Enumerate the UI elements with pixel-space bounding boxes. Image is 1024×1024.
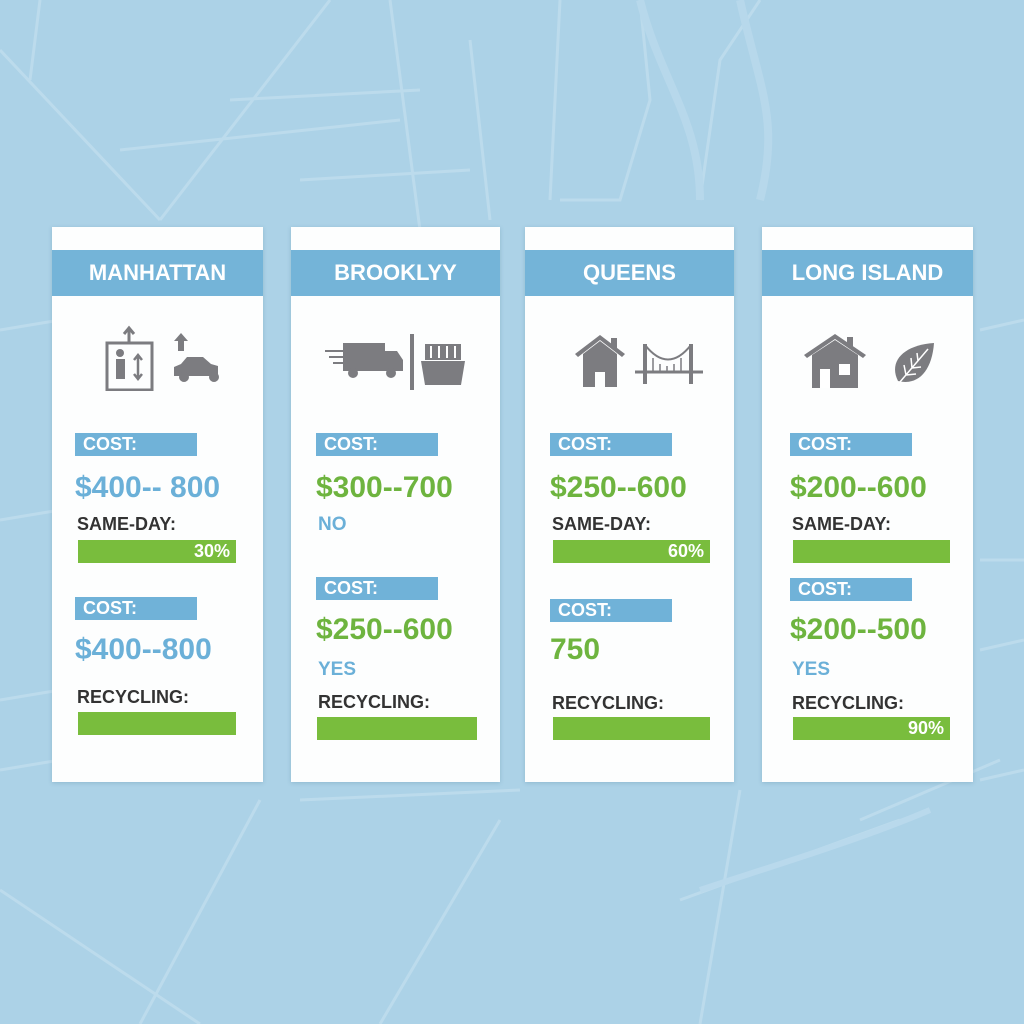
recycling bar: [317, 717, 477, 740]
NO: NO: [318, 514, 346, 535]
price: $200--600: [790, 471, 927, 504]
panel: Manhattan: [52, 227, 263, 782]
heading: [291, 250, 500, 296]
bar 60%: [553, 540, 710, 563]
price: $250--600: [550, 471, 687, 504]
same-day label: SAME-DAY:: [77, 514, 176, 534]
same-day label: SAME-DAY:: [552, 514, 651, 534]
cost label 2: COST:: [83, 598, 137, 618]
YES: YES: [318, 659, 356, 680]
recycling label: RECYCLING:: [77, 687, 189, 707]
cost label: COST:: [324, 434, 378, 454]
heading: LONG ISLAND: [792, 260, 943, 285]
heading: [525, 250, 734, 296]
price 2: $250--600: [316, 613, 453, 646]
bar 90%: [793, 717, 950, 740]
cost label: [790, 433, 912, 456]
price 2: 750: [550, 633, 600, 666]
recycling bar: [553, 717, 710, 740]
cost label 2: [790, 578, 912, 601]
YES: YES: [792, 659, 830, 680]
cost label 2: COST:: [798, 579, 852, 599]
price 2: $400--800: [75, 633, 212, 666]
recycling label: RECYCLING:: [552, 693, 664, 713]
heading: [52, 250, 263, 296]
cost label: [316, 433, 438, 456]
icon: house and leaf: [804, 334, 934, 388]
heading: MANHATTAN: [89, 260, 226, 285]
cost label 2: [550, 599, 672, 622]
cost label 2: COST:: [324, 578, 378, 598]
same-day label: SAME-DAY:: [792, 514, 891, 534]
price 2: $200--500: [790, 613, 927, 646]
icon: house and bridge: [575, 335, 703, 387]
heading: BROOKLYY: [334, 260, 457, 285]
cost label 2: [316, 577, 438, 600]
recycling label: RECYCLING:: [792, 693, 904, 713]
bar 60%: 60%: [668, 541, 704, 561]
cost label 2: COST:: [558, 600, 612, 620]
price: $400-- 800: [75, 471, 220, 504]
cost label: [550, 433, 672, 456]
bar 30%: [78, 540, 236, 563]
cost label: [75, 433, 197, 456]
bar 90%: 90%: [908, 718, 944, 738]
bar 30%: 30%: [194, 541, 230, 561]
panel: Queens: [525, 227, 734, 782]
cost label: COST:: [798, 434, 852, 454]
icon: truck and dumpster: [325, 334, 465, 390]
cost label: COST:: [83, 434, 137, 454]
same-day bar: [793, 540, 950, 563]
recycling bar: [78, 712, 236, 735]
icon: elevator and car: [106, 326, 219, 391]
panel: Brooklyn: [291, 227, 500, 782]
heading: [762, 250, 973, 296]
cost label: COST:: [558, 434, 612, 454]
price: $300--700: [316, 471, 453, 504]
panel: Long Island: [762, 227, 973, 782]
heading: QUEENS: [583, 260, 676, 285]
cost label 2: [75, 597, 197, 620]
recycling label: RECYCLING:: [318, 692, 430, 712]
